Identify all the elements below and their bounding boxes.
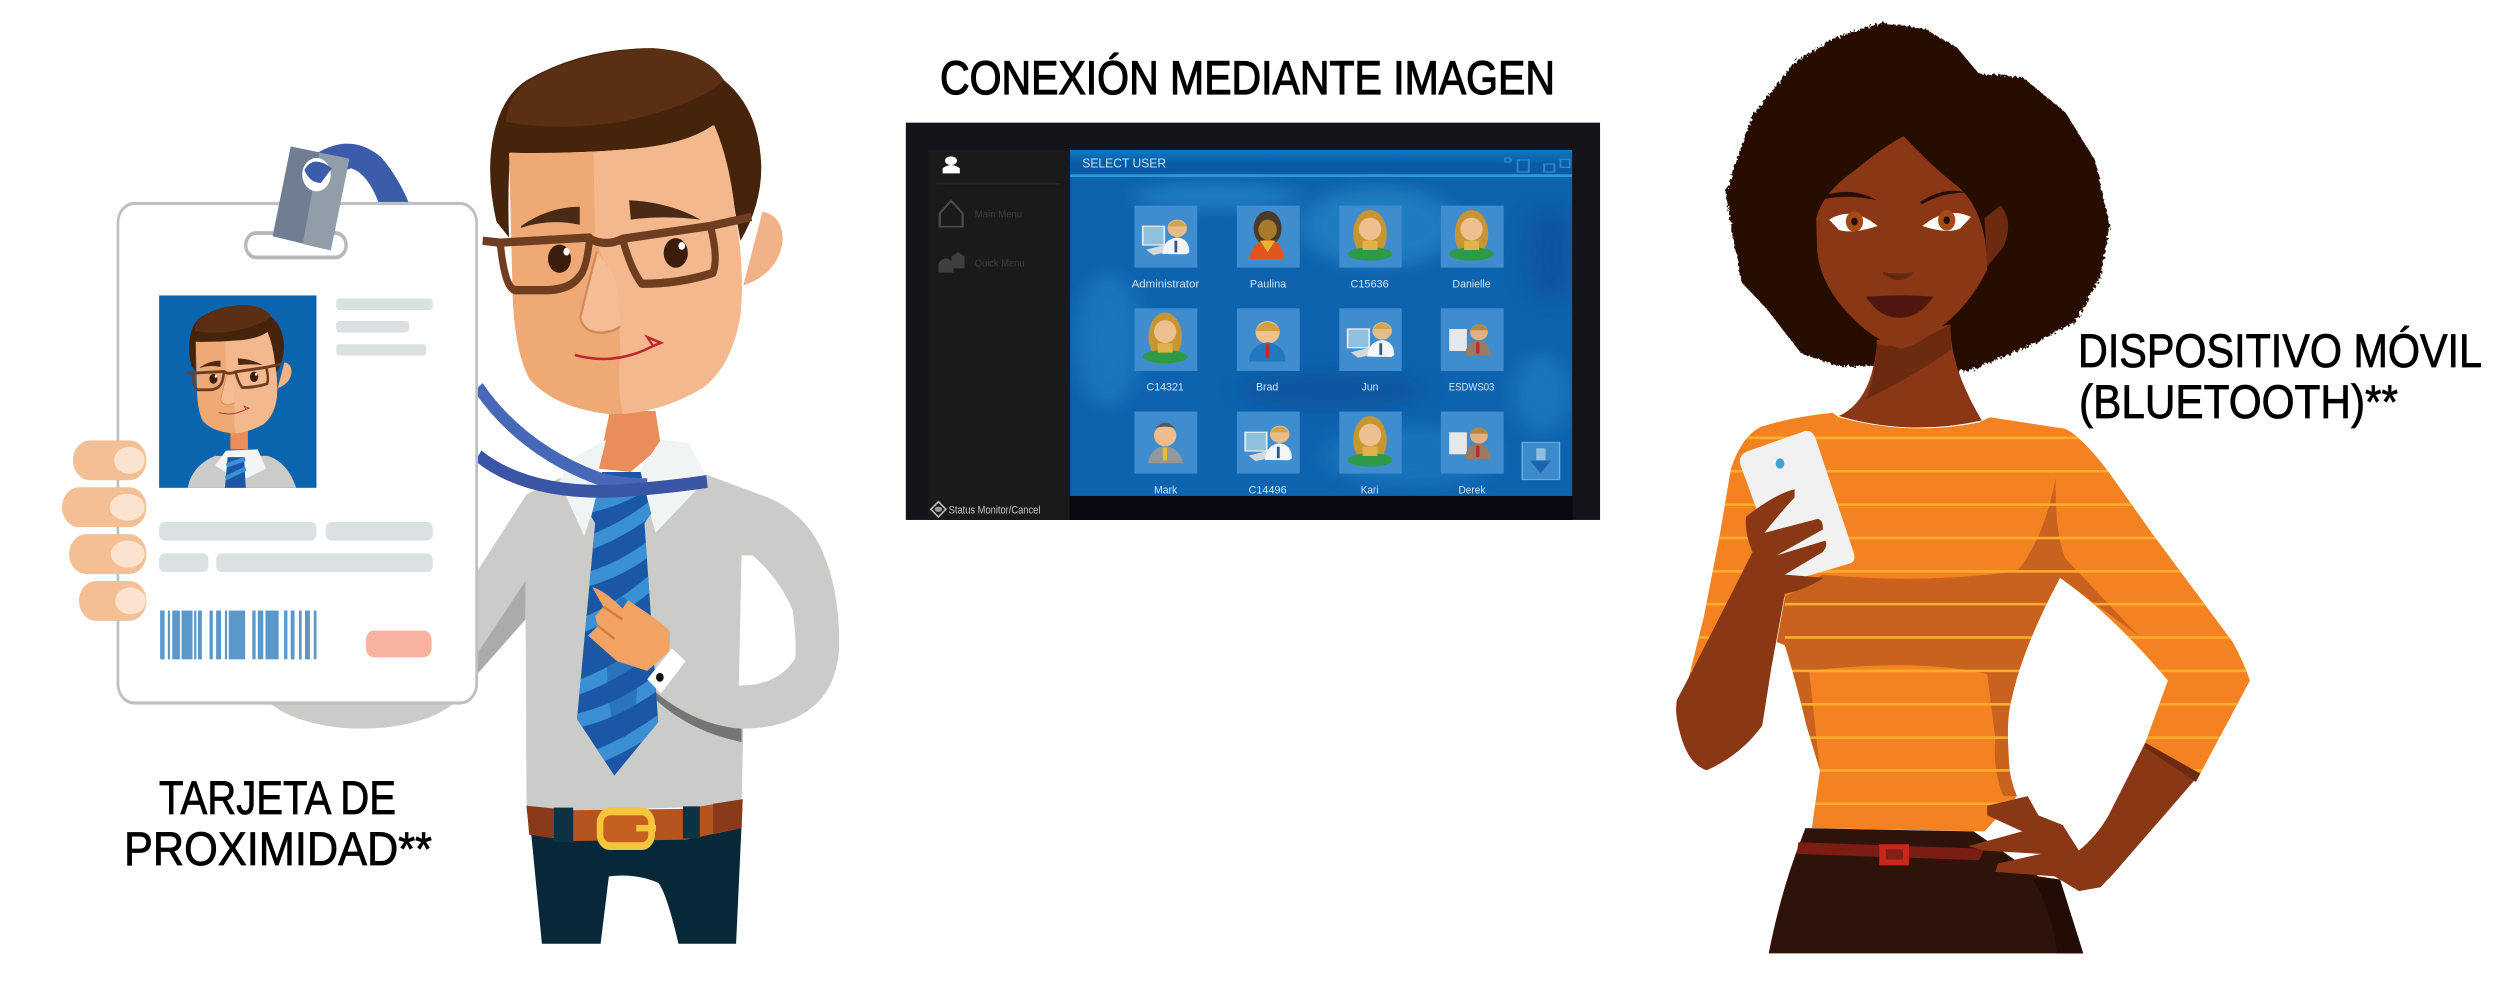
- figure: woman with mobile phone: [1676, 22, 2254, 953]
- eyes: [1829, 214, 1878, 231]
- lips: [1866, 295, 1933, 318]
- tile labels: Mark: [1154, 483, 1177, 496]
- shirt collar: [559, 440, 708, 536]
- label: tarjeta de proximidad: PROXIMIDAD**: [124, 822, 432, 875]
- head with glasses: [483, 48, 783, 414]
- pointing hand on tie: [588, 587, 686, 693]
- ID card: [118, 144, 477, 703]
- tile labels: Danielle: [1452, 278, 1491, 290]
- label: dispositivo móvil: [2078, 324, 2482, 428]
- salmon pill: [366, 630, 432, 657]
- neck: [1839, 324, 1982, 428]
- user tiles: [1134, 206, 1560, 480]
- metal clip: [273, 146, 349, 250]
- sidebar: [928, 150, 1070, 520]
- tile labels: [1132, 278, 1495, 496]
- tile labels: Jun: [1362, 381, 1378, 393]
- phone: [1740, 431, 1854, 581]
- afro hair: [1726, 22, 2110, 371]
- lanyard straps: [478, 387, 707, 491]
- ID photo: [159, 295, 316, 488]
- sidebar: Main Menu: [975, 209, 1022, 220]
- card text placeholders: [159, 299, 433, 572]
- fingers holding card: [62, 440, 146, 621]
- tile labels: Brad: [1256, 381, 1278, 393]
- belt: [1797, 842, 1984, 865]
- face: [1816, 136, 2008, 349]
- eyebrows: [1824, 191, 1966, 204]
- panel: device screen: [906, 123, 1600, 520]
- screen heading: SELECT USER: [1082, 156, 1166, 171]
- tile labels: Derek: [1458, 483, 1486, 496]
- hand holding phone: [1746, 489, 1826, 594]
- skirt: [1769, 828, 2083, 953]
- striped orange shirt: [1682, 413, 2254, 831]
- scroll down button: [1522, 442, 1560, 480]
- bottom bar: Status Monitor/Cancel: [949, 503, 1040, 516]
- screen frame: [906, 123, 1600, 520]
- belt with gold buckle: [527, 799, 743, 846]
- necktie: [577, 472, 658, 776]
- card lanyard loop: [315, 144, 409, 202]
- blue main area: [1070, 150, 1579, 496]
- label: dispositivo móvil: (BLUETOOTH)**: [2079, 375, 2398, 428]
- barcode: [160, 611, 316, 659]
- tile labels: C15636: [1350, 278, 1389, 290]
- hand on hip and forearm: [1968, 743, 2200, 891]
- sidebar: Quick Menu: [975, 258, 1025, 269]
- trousers: [531, 825, 742, 944]
- label: tarjeta de proximidad: TARJETA DE: [159, 771, 396, 824]
- figure: man with proximity card: [62, 48, 839, 944]
- label: tarjeta de proximidad: [124, 771, 432, 875]
- tile labels: Kari: [1361, 483, 1378, 496]
- nose: [1883, 273, 1913, 279]
- bottom bar: [931, 496, 1573, 520]
- tile labels: C14496: [1249, 483, 1287, 496]
- card slot: [246, 233, 346, 257]
- title: conexión mediante imagen: CONEXIÓN MEDIANTE IMAGEN: [940, 51, 1555, 104]
- card body: [118, 204, 477, 703]
- tile labels: Administrator: [1132, 278, 1200, 290]
- tile labels: C14321: [1147, 381, 1184, 393]
- tile labels: Paulina: [1250, 278, 1287, 290]
- raised forearm: [1676, 552, 1785, 770]
- neck: [598, 411, 661, 472]
- man body and shirt: [258, 475, 839, 812]
- tile labels: ESDWS03: [1449, 381, 1495, 393]
